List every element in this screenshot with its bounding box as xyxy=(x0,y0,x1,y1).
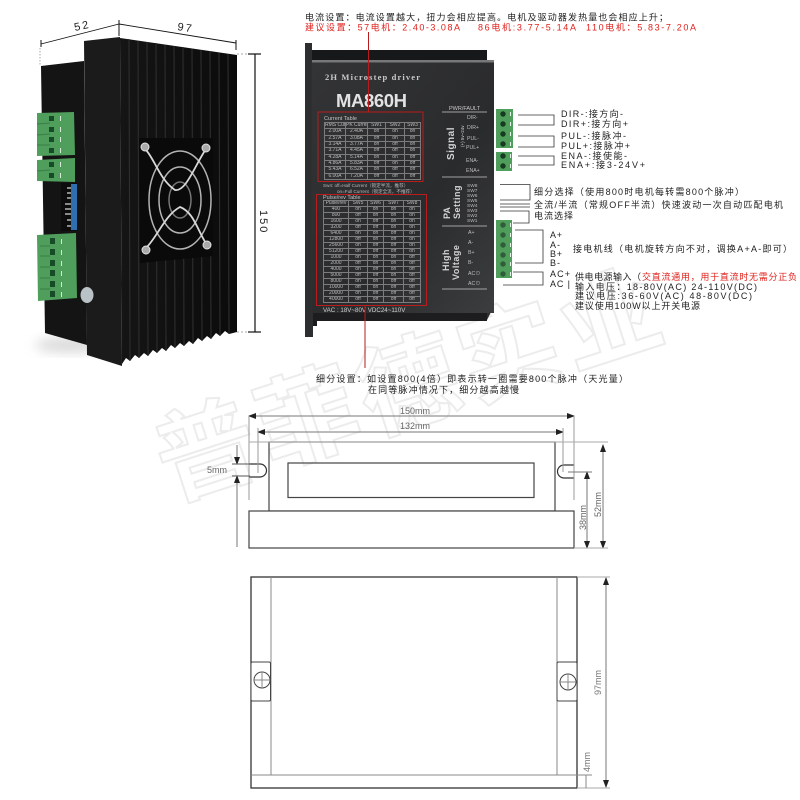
PA setting section: SW1 xyxy=(467,218,478,224)
window outline xyxy=(288,463,534,498)
power input labels: 输入电压：18-80V(AC) 24-110V(DC) xyxy=(575,281,757,292)
high voltage section: Voltage xyxy=(451,245,461,280)
photo: driver with heat sink and fan xyxy=(35,37,237,366)
dimension 5mm: 5mm xyxy=(207,465,227,475)
panel terminals: signal lower xyxy=(496,152,512,171)
signal section: DIR+ xyxy=(467,125,479,131)
signal section: ENA- xyxy=(466,158,479,164)
panel terminals: power xyxy=(496,220,512,278)
dimension 97: 97 xyxy=(177,21,194,36)
power input labels: AC | xyxy=(550,279,570,289)
green terminal block: signal lower xyxy=(37,158,75,182)
switch setting labels: 细分选择（使用800时电机每转需800个脉冲） xyxy=(534,186,744,197)
signal pin labels: ENA-:接使能- xyxy=(561,150,627,161)
top note: 电流设置：电流设置越大，扭力会相应提高。电机及驱动器发热量也会相应上升； xyxy=(305,12,668,22)
motor wiring labels: A+ xyxy=(550,230,562,240)
drawing: top view xyxy=(251,577,610,788)
driver front panel xyxy=(305,43,513,337)
dimension 97 xyxy=(119,20,236,50)
PA setting section: SW3 xyxy=(467,208,478,214)
watermark: 普菲德实业 xyxy=(142,251,681,521)
high voltage section: High xyxy=(441,249,451,271)
current table xyxy=(324,122,421,180)
power input labels xyxy=(550,269,797,311)
drawing: side view xyxy=(207,406,608,548)
signal pin labels: DIR+:接方向+ xyxy=(561,118,628,129)
power input labels: 建议使用100W以上开关电源 xyxy=(575,300,700,311)
photo dimensions xyxy=(40,19,269,332)
rail lines xyxy=(251,577,592,775)
power input labels: 建议电压:36-60V(AC) 48-80V(DC) xyxy=(575,290,752,301)
outer outline xyxy=(251,577,577,788)
power input labels: 交直流通用，用于直流时无需分正负 xyxy=(642,271,797,282)
dimension 52mm: 52mm xyxy=(593,492,603,517)
dimension 5mm xyxy=(207,445,250,547)
dimension 97mm: 97mm xyxy=(593,670,603,695)
dimension 52 xyxy=(40,19,119,66)
dimension 38mm: 38mm xyxy=(578,505,588,530)
signal section: PUL+ xyxy=(466,145,479,151)
green terminal block: signal upper xyxy=(37,112,75,156)
heat sink fins xyxy=(120,38,237,364)
half current notes: Sw4: off=Half Current（锁定半流，推荐） xyxy=(323,182,408,189)
signal section: ENA+ xyxy=(466,168,480,174)
PA setting section: SW8 xyxy=(467,183,478,189)
motor wiring labels: 接电机线（电机旋转方向不对，调换A+A-即可） xyxy=(573,243,792,254)
cooling fan with wire guard xyxy=(139,138,213,263)
top note xyxy=(305,12,696,32)
dimension 150: 150 xyxy=(257,210,269,234)
dimension 38mm xyxy=(568,472,592,548)
microstep note: 细分设置：如设置800(4倍）即表示转一圈需要800个脉冲（天光量） xyxy=(316,373,628,384)
signal pin labels: PUL-:接脉冲- xyxy=(561,130,626,141)
dimension 52: 52 xyxy=(73,19,92,34)
left mounting slot xyxy=(249,464,266,477)
dimension 4mm xyxy=(582,752,592,788)
motor wiring labels: B- xyxy=(550,258,560,268)
motor wiring labels: A- xyxy=(550,240,560,250)
microstep note: 在同等脉冲情况下，细分越高越慢 xyxy=(368,384,519,395)
leader lines xyxy=(500,115,554,285)
panel body xyxy=(305,43,494,337)
PA setting section: SW6 xyxy=(467,193,478,199)
red callout: current table xyxy=(318,32,423,182)
signal pin labels: PUL+:接脉冲+ xyxy=(561,140,630,151)
pulse table title: Pulse/rev Table xyxy=(323,195,361,201)
signal section: Signal xyxy=(446,127,457,160)
green terminal block: power xyxy=(37,233,77,301)
PA setting section: SW7 xyxy=(467,188,478,194)
ground button xyxy=(80,287,94,303)
dimension 150mm: 150mm xyxy=(400,406,430,416)
panel terminals: signal upper xyxy=(496,109,513,148)
dimension 4mm: 4mm xyxy=(582,752,592,772)
PA setting section: SW2 xyxy=(467,213,478,219)
half current notes: on=Full Current（锁定全流，不推荐） xyxy=(337,188,415,195)
switch setting labels: 全流/半流（常规OFF半流）快速波动一次自动匹配电机 xyxy=(534,199,783,210)
left tab with screw xyxy=(251,662,270,701)
panel subtitle: 2H Microstep driver xyxy=(325,72,420,82)
PWR/FAULT label: PWR/FAULT xyxy=(449,106,481,112)
right tab with screw xyxy=(557,662,577,701)
motor wiring labels xyxy=(550,230,792,268)
signal pin labels: DIR-:接方向- xyxy=(561,108,623,119)
power input labels: 供电电源输入（ xyxy=(575,271,641,282)
signal section: (+) 5v~24v xyxy=(460,125,465,147)
base outline xyxy=(249,511,574,548)
right mounting slot xyxy=(558,465,574,478)
model name: MA860H xyxy=(336,90,407,111)
current table title: Current Table xyxy=(324,116,357,122)
blue DIP switch xyxy=(61,183,77,231)
switch setting labels: 电流选择 xyxy=(534,210,573,221)
red callout: pulse table xyxy=(316,194,426,368)
high voltage section: A+ xyxy=(468,230,474,236)
high voltage section: AC⊙ xyxy=(468,270,480,277)
photo shadow xyxy=(35,338,105,352)
top note: 86电机:3.77-5.14A xyxy=(478,22,576,32)
upper body outline xyxy=(269,442,555,511)
high voltage section: A- xyxy=(468,240,473,246)
signal pin labels xyxy=(561,108,645,170)
PA setting section: SW5 xyxy=(467,198,478,204)
microstep note xyxy=(316,373,628,395)
signal pin labels: ENA+:接3-24V+ xyxy=(561,159,645,170)
PA setting section xyxy=(442,183,487,226)
high voltage section xyxy=(441,230,487,289)
PWR/FAULT label xyxy=(442,106,487,112)
side housing xyxy=(41,61,87,345)
switch setting labels xyxy=(534,186,783,221)
top note: 110电机：5.83-7.20A xyxy=(586,22,696,32)
front edge of heat sink xyxy=(84,37,122,366)
signal section xyxy=(442,115,487,177)
PA setting section: Setting xyxy=(452,185,462,219)
top note: 建议设置：57电机：2.40-3.08A xyxy=(305,22,460,32)
power input labels: AC+ xyxy=(550,269,570,279)
motor wiring labels: B+ xyxy=(550,249,562,259)
half current notes xyxy=(323,182,415,195)
signal section: PUL- xyxy=(467,136,479,142)
high voltage section: B+ xyxy=(468,250,474,256)
high voltage section: B- xyxy=(468,260,473,266)
signal section: DIR- xyxy=(467,115,478,121)
high voltage section: AC⊙ xyxy=(468,280,480,287)
pulse table xyxy=(323,200,421,303)
voltage note: VAC : 18V~80V VDC24~110V xyxy=(323,307,406,314)
PA setting section: PA xyxy=(442,207,452,219)
dimension 132mm: 132mm xyxy=(400,421,430,431)
PA setting section: SW4 xyxy=(467,203,478,209)
